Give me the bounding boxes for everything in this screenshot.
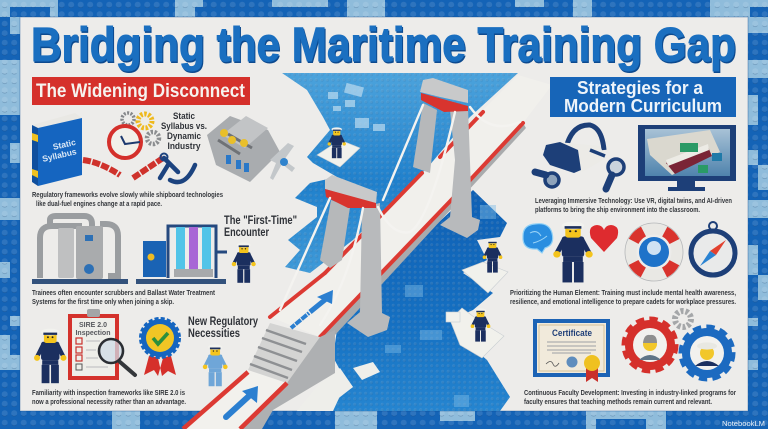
text: trainees xyxy=(32,288,215,306)
text: regulatory frameworks xyxy=(32,190,223,208)
icon: monitor with digital twin ship xyxy=(638,125,736,191)
heading: new regulatory necessities xyxy=(188,316,258,340)
white brick shore xyxy=(297,362,380,411)
figure: trainee xyxy=(232,242,256,283)
heading: the widening disconnect xyxy=(32,77,250,105)
icon: VR headset and controllers xyxy=(535,125,624,189)
panel: strategies for a modern curriculum xyxy=(510,77,736,406)
front tower xyxy=(320,175,390,337)
heading: the first-time encounter: The "First-Time" xyxy=(224,215,297,227)
rear tower left leg xyxy=(413,103,437,173)
bridge cables xyxy=(280,105,520,325)
icon: engine xyxy=(207,116,295,182)
icon: broken chain and anchor xyxy=(83,154,195,182)
icon: magnifying glass xyxy=(99,339,135,375)
figures on the water xyxy=(328,127,502,342)
heading: the widening disconnect: The Widening Disconnect xyxy=(36,81,246,102)
text: human element xyxy=(510,288,736,306)
figure: inspector xyxy=(34,329,66,383)
heading: static syllabus vs dynamic industry: Syllabus vs. xyxy=(161,121,207,132)
text: familiarity: Familiarity with inspection frameworks like SIRE 2.0 is xyxy=(32,388,185,397)
text: regulatory frameworks: Regulatory frameworks evolve slowly while shipboard technologies xyxy=(32,190,223,199)
heading: static syllabus vs dynamic industry: Dynamic xyxy=(167,131,201,142)
text: familiarity: now a professional necessity rather than an advantage. xyxy=(32,397,186,406)
figure: human element officer xyxy=(553,222,593,282)
text: regulatory frameworks: like dual-fuel engines change at a rapid pace. xyxy=(36,199,162,208)
icon: brain xyxy=(523,224,553,253)
heading: strategies: Modern Curriculum xyxy=(564,96,722,116)
text: trainees: Systems for the first time only when joining a skip. xyxy=(32,297,174,306)
icon: SIRE inspection clipboard xyxy=(68,309,119,380)
icon: compass xyxy=(691,222,735,275)
heading: the first-time encounter: Encounter xyxy=(224,227,269,239)
rear tower right leg xyxy=(440,107,480,238)
central bridge illustration xyxy=(183,73,552,429)
deck lower face xyxy=(320,123,526,337)
heading: new regulatory necessities: New Regulatory xyxy=(188,316,258,328)
icon: lifebuoy xyxy=(625,223,683,281)
lower water xyxy=(322,190,510,411)
icon: static syllabus book xyxy=(32,113,82,186)
text: immersive technology xyxy=(535,196,732,214)
heading: static syllabus vs dynamic industry: Static xyxy=(173,111,195,122)
text: familiarity xyxy=(32,388,186,406)
ramp xyxy=(183,323,335,429)
icon: scrubber machine xyxy=(32,216,128,284)
text: faculty development xyxy=(524,388,736,406)
rear tower cap xyxy=(420,78,468,112)
heading: strategies: Strategies for a xyxy=(577,78,704,98)
heading: static syllabus vs dynamic industry: Industry xyxy=(168,141,201,152)
icon: SIRE inspection clipboard: Inspection xyxy=(75,330,111,337)
icon: static syllabus book: Syllabus xyxy=(41,146,78,164)
icon: approval badge xyxy=(141,319,179,376)
heading: the first-time encounter xyxy=(224,215,297,239)
icon: certificate xyxy=(533,319,610,382)
watermark: NotebookLM: NotebookLM xyxy=(722,419,765,428)
icon: faculty gears xyxy=(625,311,732,378)
heading: static syllabus vs dynamic industry xyxy=(161,111,207,152)
icon: static syllabus book: Static xyxy=(52,137,77,152)
text: faculty development: faculty ensures that teaching methods remain current and relevant. xyxy=(524,397,712,406)
icon: clock with gears xyxy=(109,113,159,158)
heading: strategies xyxy=(550,77,736,117)
text: trainees: Trainees often encounter scrubbers and Ballast Water Treatment xyxy=(32,288,215,297)
stepping bricks xyxy=(317,140,508,358)
deck arrows xyxy=(226,290,333,417)
panel: the widening disconnect xyxy=(32,77,297,406)
text: immersive technology: platforms to bring the ship environment into the classroom. xyxy=(535,205,700,214)
bridge deck upper xyxy=(270,75,552,337)
icon: certificate: Certificate xyxy=(552,328,592,338)
icon: heart xyxy=(590,225,618,252)
figure: light blue officer xyxy=(203,344,228,386)
icon: ballast water treatment system xyxy=(136,226,227,284)
upper water xyxy=(282,73,518,273)
icon: SIRE inspection clipboard: SIRE 2.0 xyxy=(79,322,107,329)
heading: new regulatory necessities: Necessities xyxy=(188,328,240,340)
deck rails xyxy=(270,112,523,337)
